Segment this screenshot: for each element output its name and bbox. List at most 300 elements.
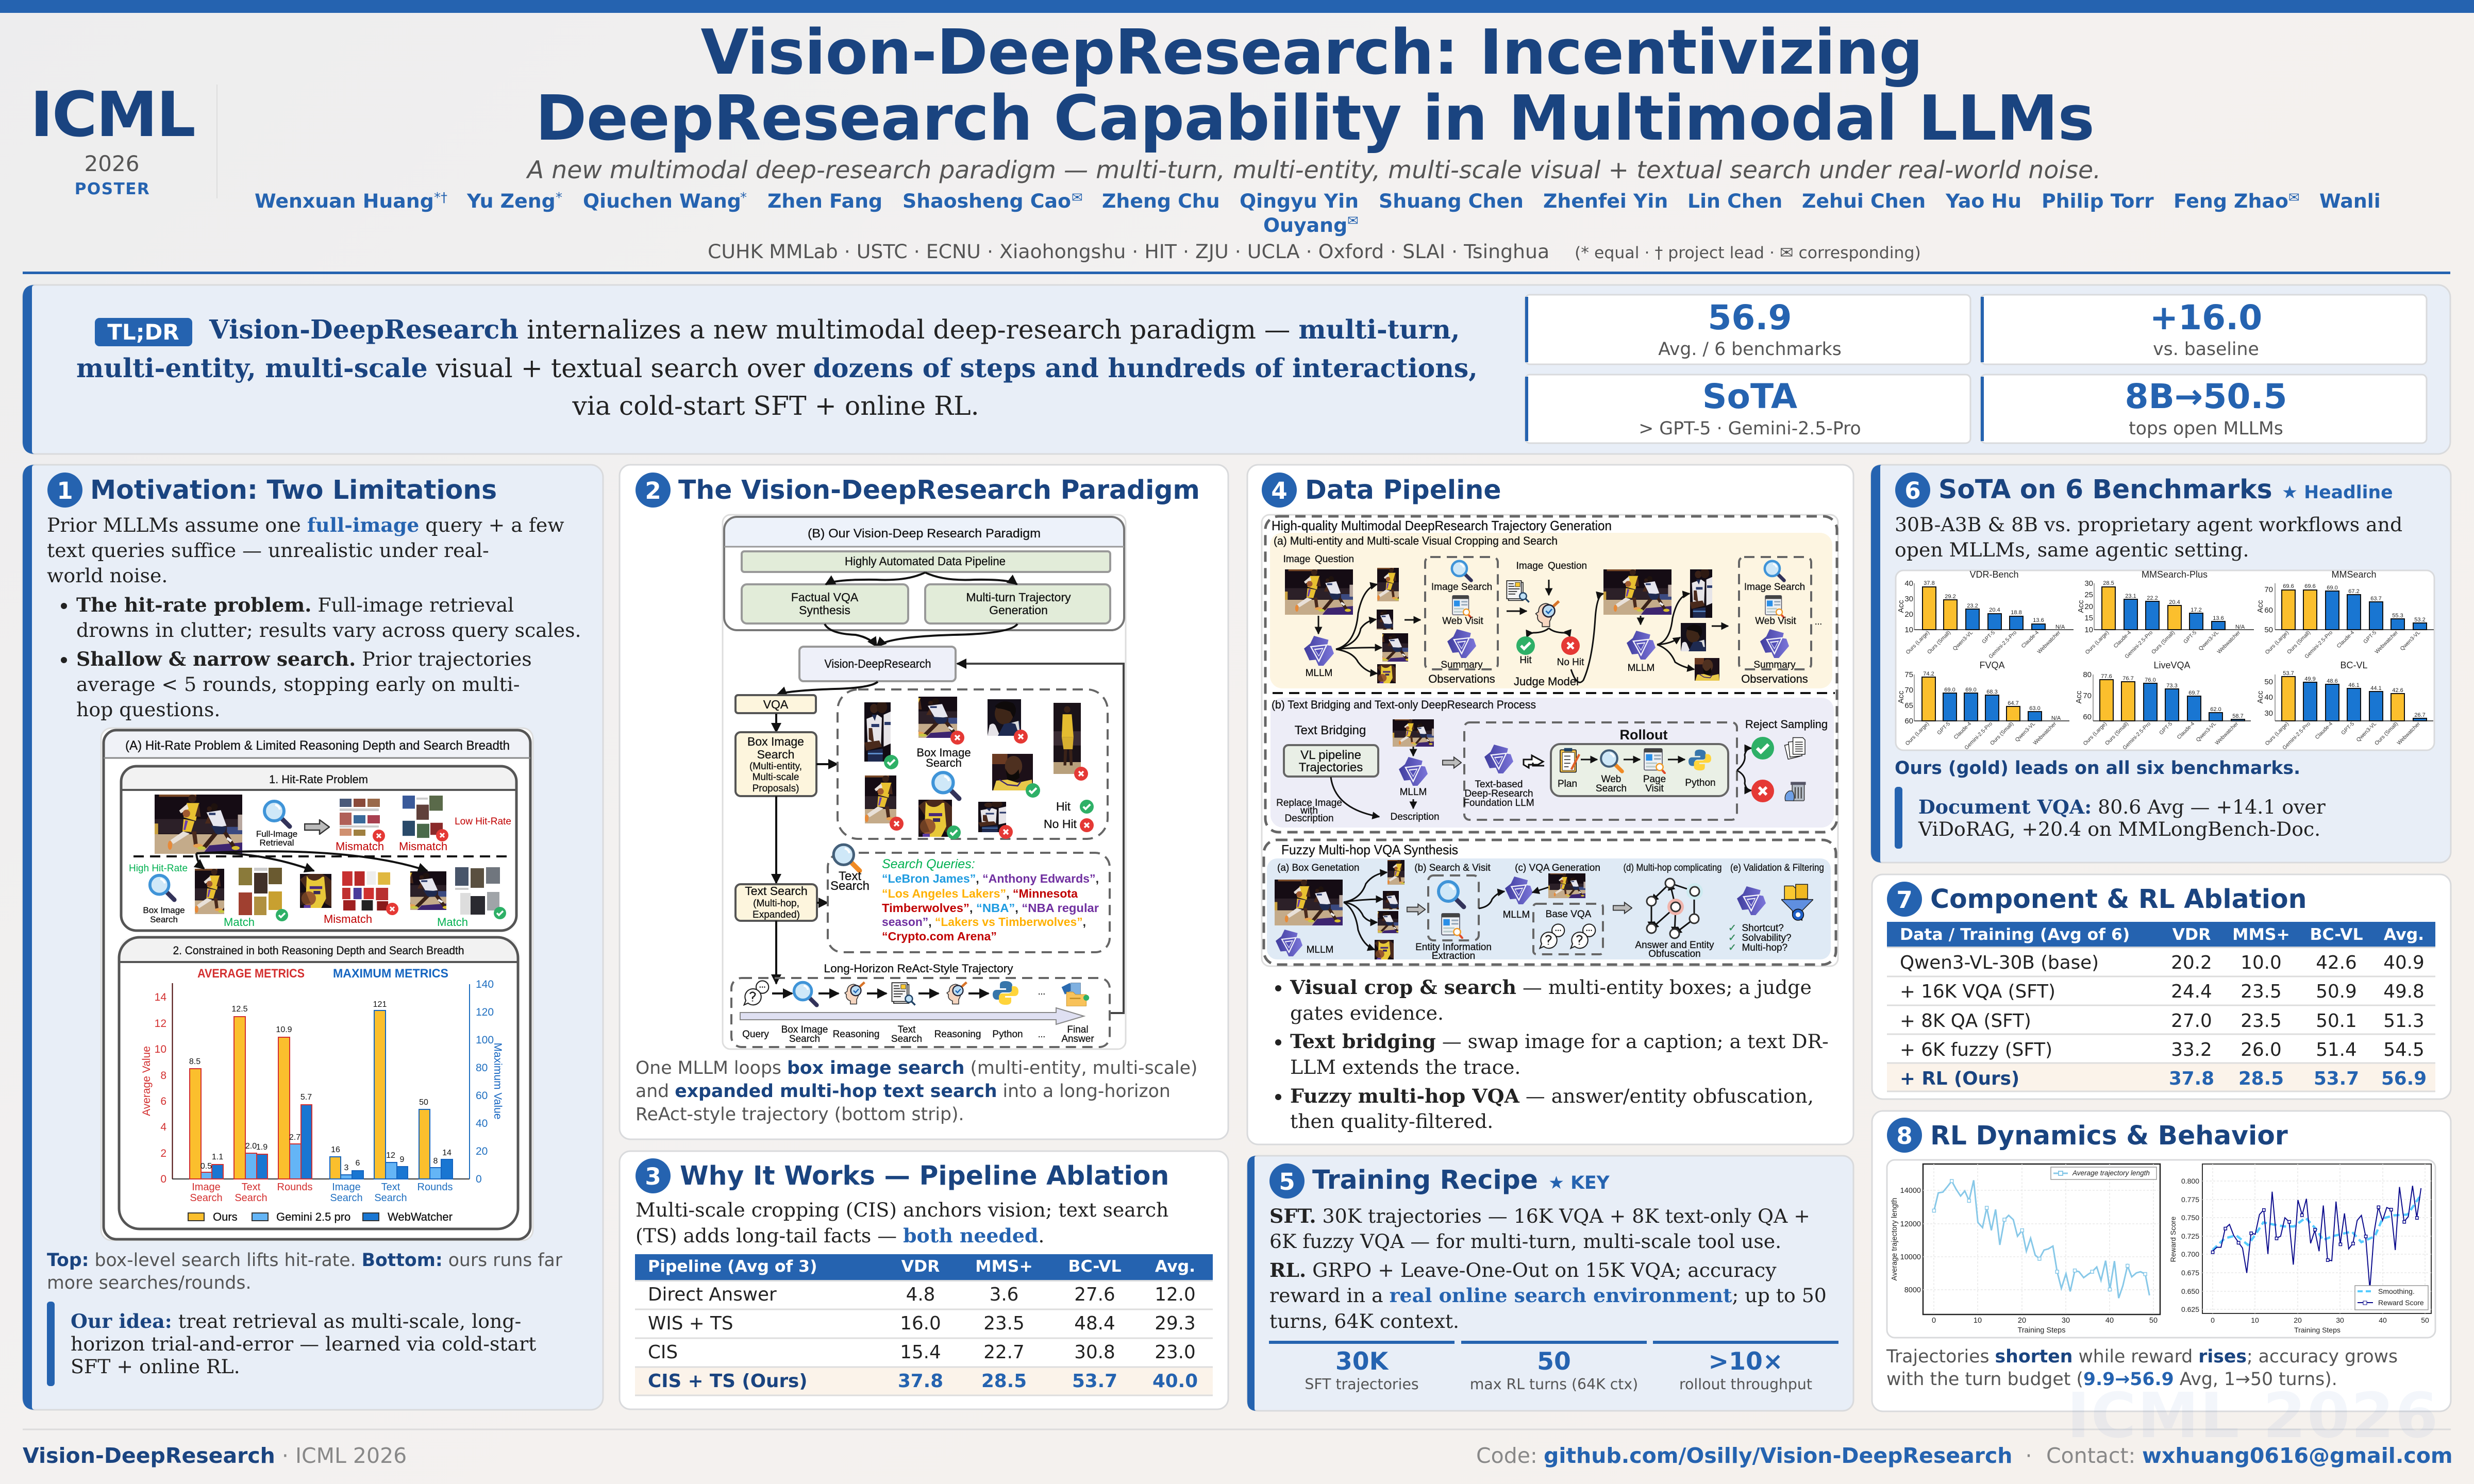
motivation text: world noise. [47,564,168,587]
chart: trajectory length: 40 [2105,1317,2114,1325]
stat: 56.9: Avg. / 6 benchmarks [1658,339,1842,360]
chart: MMSearch-Plus [2077,569,2254,660]
subfigure bar chart: 0 [160,1173,166,1185]
table: component ablation: MMS+ [2232,925,2290,944]
conference badge [30,79,217,198]
recipe text: RL. GRPO + Leave-One-Out on 15K VQA; accuracy [1269,1259,1777,1281]
watermark: ICML 2026 [2067,1380,2439,1452]
chart: MMSearch-Plus: 17.2 [2191,607,2202,613]
subfigure bar chart: 5.7 [300,1093,312,1102]
chart: VDR-Bench [1897,569,2074,660]
stat: SoTA [1525,375,1970,443]
subfigure bar chart: Search [190,1192,223,1204]
stat: 50: 50 [1537,1347,1571,1376]
chart: MMSearch: Claude-4 [2335,630,2355,649]
table: component ablation: 50.9 [2316,981,2357,1002]
chart: BC-VL: Claude-4 [2314,721,2334,740]
TL;DR summary text [76,314,1478,421]
heading 5: 5 [1279,1168,1295,1195]
pipeline bullets: gates evidence. [1290,1002,1444,1024]
heading 7: 7 [1896,886,1913,914]
authors: Lin Chen [1687,190,1782,212]
observations box: Web Visit [1755,616,1796,627]
heading 4: Data Pipeline [1305,475,1501,505]
subfigure hit-rate: Match [224,916,255,929]
subfigure bar chart: 9 [400,1155,405,1164]
chart: FVQA: Acc [1897,690,1905,704]
chart: MMSearch-Plus: 15 [2084,614,2093,622]
table: component ablation: + 16K VQA (SFT) [1900,981,2055,1002]
chart: reward score: 10 [2251,1316,2259,1324]
chart: VDR-Bench: 29.2 [1945,594,1956,600]
chart: FVQA: 65 [1904,701,1913,710]
rollout box: Page [1643,774,1666,785]
table: pipeline ablation: 23.5 [983,1313,1025,1334]
box image search step: Search [757,748,794,761]
motivation text [47,514,581,721]
chart: BC-VL: Qwen3-VL [2355,721,2378,743]
stage (b): text bridging: VL pipeline [1300,748,1361,762]
fuzzy VQA synthesis: MLLM [1307,945,1333,955]
observations box [1739,557,1811,685]
rollout box: Search [1596,783,1627,794]
chart: LiveVQA: 69.7 [2188,690,2200,696]
stat: >10x [1653,1341,1838,1393]
subfigure bar chart: 50 [419,1098,428,1107]
chart: trajectory length: 0 [1932,1317,1936,1325]
authors: ✉ [1072,190,1083,206]
table: component ablation: 40.9 [2383,952,2425,973]
heading 5 [1269,1163,1610,1199]
stat: SoTA: > GPT-5 · Gemini-2.5-Pro [1639,418,1861,439]
table: component ablation: 23.5 [2241,1010,2282,1032]
panel 5: training recipe [1247,1156,1853,1411]
chart: MMSearch-Plus: 22.2 [2147,595,2158,601]
chart: MMSearch: 67.2 [2348,588,2360,595]
chart: BC-VL: 40 [2264,693,2273,702]
benchmarks takeaway: Ours (gold) leads on all six benchmarks. [1895,758,2300,779]
chart: trajectory length: Average trajectory length [1891,1198,1899,1280]
RL charts [1887,1160,2435,1338]
fuzzy VQA synthesis: ✓ Shortcut? [1728,923,1784,934]
subfigure bar chart: 6 [356,1159,360,1168]
table: pipeline ablation: 3.6 [990,1284,1018,1305]
panel 6: SoTA benchmarks [1871,465,2451,863]
heading 6: ★ Headline [2282,482,2393,503]
chart: VDR-Bench: Ours (Large) [1905,630,1931,655]
table: component ablation: 24.4 [2171,981,2212,1002]
ReAct trajectory strip: Text [898,1024,916,1035]
subfigure hit-rate [121,766,516,931]
chart: trajectory length: 10 [1974,1317,1982,1325]
observations box: Image Search [1431,582,1492,593]
chart: FVQA: Ours (Small) [1989,721,2015,747]
observations box: Observations [1741,672,1808,685]
benchmarks intro: 30B-A3B & 8B vs. proprietary agent workflows and [1895,513,2402,536]
subfigure bar chart: 2.7 [289,1133,300,1142]
chart: MMSearch: 55.3 [2392,613,2403,619]
table: pipeline ablation: 12.0 [1155,1284,1196,1305]
search queries box [828,845,1110,952]
authors: Shuang Chen [1379,190,1524,212]
chart: VDR-Bench: 20.4 [1989,607,2000,613]
chart legend: Ours [213,1210,238,1223]
chart: LiveVQA: 76.7 [2122,676,2134,682]
chart: LiveVQA: 76.0 [2145,677,2156,683]
ReAct trajectory strip: Final [1067,1024,1089,1035]
chart: BC-VL: 44.1 [2370,685,2382,692]
subfigure bar chart: 8.5 [189,1057,200,1066]
affiliations [708,240,1921,263]
observations box: Web Visit [1442,616,1483,627]
pipeline bar: Highly Automated Data Pipeline [845,554,1006,568]
table: pipeline ablation: CIS [648,1342,678,1363]
stat: +16.0 [1981,295,2427,364]
rollout box [1463,722,1737,820]
panel 8: RL dynamics [1872,1111,2451,1411]
base VQA box [1533,904,1603,954]
paradigm caption [636,1058,1197,1125]
subfigure bar chart: 0.5 [200,1162,212,1171]
chart: LiveVQA: 62.0 [2210,706,2221,713]
chart: FVQA: Claude-4 [1952,721,1972,740]
authors: Qiuchen Wang [583,190,741,212]
authors: Qingyu Yin [1240,190,1359,212]
authors: Wenxuan Huang [255,190,434,212]
fuzzy VQA synthesis: Entity Information [1415,942,1492,953]
table: component ablation: Avg. [2384,925,2424,944]
chart: FVQA [1897,660,2069,751]
authors: ✉ [2288,190,2300,206]
chart: MMSearch: 50 [2264,626,2273,634]
recipe text: SFT. 30K trajectories — 16K VQA + 8K text-only QA + [1269,1205,1810,1227]
subfigure bar chart: 16 [331,1145,340,1154]
Vision-DeepResearch box [799,647,956,681]
table: component ablation: BC-VL [2310,925,2363,944]
subfigure bar chart: 12 [386,1151,395,1160]
chart: LiveVQA: Qwen3-VL [2195,721,2217,743]
subfigure bar chart: Maximum Value [492,1043,504,1119]
chart: reward score: 0.725 [2181,1232,2199,1240]
stage (a): visual cropping: (a) Multi-entity and Multi-scale Visual Cropping and Search [1274,534,1558,547]
affiliations: CUHK MMLab · USTC · ECNU · Xiaohongshu · HIT · ZJU · UCLA · Oxford · SLAI · Tsinghua [708,240,1549,263]
table: component ablation: + 8K QA (SFT) [1900,1010,2031,1032]
heading 7: Component & RL Ablation [1930,884,2307,914]
table: pipeline ablation: 15.4 [900,1342,941,1363]
table: component ablation: + RL (Ours) [1900,1068,2019,1089]
chart: FVQA: 69.0 [1965,687,1977,693]
stat: SoTA: SoTA [1702,377,1797,416]
table: pipeline ablation: 27.6 [1074,1284,1115,1305]
callout: our idea: horizon trial-and-error — learned via cold-start [71,1333,536,1355]
table: pipeline ablation: WIS + TS [648,1313,733,1334]
chart: FVQA: FVQA [1979,660,2005,670]
figure A [101,728,533,1240]
stat: 56.9 [1525,295,1970,364]
affiliations: (* equal · † project lead · ✉ corresponding) [1575,244,1921,262]
stage (a): visual cropping: No Hit [1557,657,1584,668]
callout: document VQA [1895,787,2326,849]
subfigure bar chart: 1.9 [256,1143,268,1152]
chart: reward score: 0.775 [2181,1195,2199,1204]
benchmarks intro [1895,513,2402,561]
heading 6 [1895,473,2393,508]
footer links: Code: [1476,1443,1537,1468]
chart: LiveVQA: Ours (Large) [2082,721,2108,747]
chart: MMSearch-Plus: 23.1 [2125,593,2136,599]
footer [23,1429,2453,1468]
chart: LiveVQA: Claude-4 [2176,721,2196,740]
stage (a): visual cropping: MLLM [1306,668,1332,679]
authors: Zhenfei Yin [1543,190,1668,212]
chart: VDR-Bench: Qwen3-VL [1952,630,1974,652]
ReAct trajectory strip [731,978,1110,1047]
chart: BC-VL: Acc [2256,690,2265,704]
chart: FVQA: 63.0 [2029,705,2041,712]
chart: MMSearch-Plus: N/A [2235,624,2245,630]
subfigure bar chart: 3 [344,1163,349,1172]
chart: LiveVQA: 73.3 [2166,683,2178,689]
TL;DR summary text: multi-entity, multi-scale visual + textual search over dozens of steps and hundreds of interactions, [76,353,1478,383]
subtitle: A new multimodal deep-research paradigm — multi-turn, multi-entity, multi-scale visual + textual search under real-world noise. [526,156,2101,184]
text search step: (Multi-hop, [753,898,799,909]
box image search step [735,732,816,796]
ReAct trajectory strip: Search [789,1034,820,1044]
chart: MMSearch-Plus: 13.6 [2213,615,2224,621]
stage (a): visual cropping: Judge Model [1514,675,1579,688]
stat: +16.0: +16.0 [2150,298,2262,338]
stat: +16.0: vs. baseline [2153,339,2259,360]
chart: trajectory length [1891,1164,2160,1335]
ReAct trajectory strip: Search [891,1034,922,1044]
table: pipeline ablation: 40.0 [1152,1371,1198,1392]
chart: FVQA: 74.2 [1923,671,1934,677]
box image search step: (Multi-entity, [749,761,802,772]
chart: FVQA: 68.3 [1986,689,1998,695]
chart: MMSearch-Plus: Ours (Large) [2084,630,2110,655]
rollout box: Deep-Research [1464,788,1533,799]
subfigure bar chart: 120 [476,1006,494,1018]
chart: MMSearch-Plus: Acc [2077,600,2085,613]
chart: reward score: 40 [2379,1316,2387,1324]
recipe text: 6K fuzzy VQA — for multi-turn, multi-scale tool use. [1269,1230,1781,1253]
motivation text: The hit-rate problem. Full-image retrieval [76,594,514,616]
chart: VDR-Bench: Ours (Small) [1926,630,1952,655]
chart: reward score: 0 [2211,1316,2215,1324]
chart: MMSearch-Plus: 10 [2084,626,2093,634]
subfigure hit-rate: Mismatch [324,913,372,925]
factual VQA box [742,584,908,623]
chart: trajectory length: 8000 [1904,1286,1921,1294]
table: pipeline ablation: Avg. [1155,1257,1195,1276]
stat: 56.9: 56.9 [1708,298,1792,338]
footer links [1476,1443,2453,1468]
VQA box: VQA [763,698,789,711]
figure A caption: more searches/rounds. [47,1273,251,1293]
subfigure bar chart: 121 [373,1000,387,1009]
benchmarks intro: open MLLMs, same agentic setting. [1895,538,2249,561]
authors: Yu Zeng [466,190,556,212]
chart: reward score: Smoothing. [2378,1287,2415,1295]
rollout box: Rollout [1620,727,1667,743]
ablation intro text: (TS) adds long-tail facts — both needed. [636,1224,1044,1247]
table: pipeline ablation: MMS+ [975,1257,1033,1276]
stage (b): text bridging [1271,698,1834,828]
chart: MMSearch: Acc [2256,600,2265,613]
chart: reward score: 0.700 [2181,1250,2199,1258]
RL caption: with the turn budget (9.9→56.9 Avg, 1→50 turns). [1886,1369,2337,1390]
authors: *† [434,190,447,206]
chart: VDR-Bench: Gemini-2.5-Pro [1987,630,2018,660]
observations box: Summary [1441,660,1483,670]
stage (b): text bridging: Description [1390,812,1440,822]
heading 5: ★ KEY [1548,1173,1610,1193]
top accent bar [0,0,2474,13]
chart: reward score: 0.800 [2181,1177,2199,1185]
subfigure bar chart: 4 [160,1121,166,1133]
search queries box: Text [839,869,861,883]
subfigure bar chart: 12.5 [231,1005,248,1014]
search queries box: “Los Angeles Lakers”, “Minnesota [882,887,1078,900]
chart: MMSearch-Plus: MMSearch-Plus [2142,569,2208,580]
subfigure bar chart: 10 [155,1043,166,1055]
stat: 30K [1269,1341,1455,1393]
subfigure bar chart: 20 [476,1145,488,1157]
panel 3: pipeline ablation [620,1151,1228,1409]
table: component ablation: 42.6 [2316,952,2357,973]
callout: document VQA: Document VQA: 80.6 Avg — +14.1 over [1918,796,2326,818]
chart: MMSearch: 69.6 [2283,583,2294,589]
subfigure bar chart: 14 [442,1149,452,1157]
chart: FVQA: Qwen3-VL [2014,721,2036,743]
stat: 8B to 50.5: 8B→50.5 [2125,377,2287,416]
chart: VDR-Bench: 10 [1904,626,1913,634]
ReAct trajectory strip: ... [1038,987,1045,997]
entity graph [1647,879,1703,938]
panel 4: data pipeline [1247,465,1853,1144]
fuzzy VQA synthesis: (e) Validation & Filtering [1730,863,1824,873]
authors: Wanli [2319,190,2381,212]
stage (b): text bridging: Trajectories [1299,761,1363,774]
heading 8: 8 [1896,1122,1913,1150]
figure B: (B) Our Vision-Deep Research Paradigm [808,527,1041,541]
chart: FVQA: Gemini-2.5-Pro [1963,721,1994,751]
chart: reward score: 0.650 [2181,1287,2199,1295]
fuzzy VQA synthesis: Fuzzy Multi-hop VQA Synthesis [1281,842,1458,857]
authors: Philip Torr [2042,190,2154,212]
chart: VDR-Bench: 13.6 [2033,617,2044,623]
chart: trajectory length: 14000 [1900,1187,1921,1195]
heading 1: Motivation: Two Limitations [90,475,497,505]
fuzzy VQA synthesis: Answer and Entity [1635,940,1714,951]
chart: MMSearch: Ours (Small) [2286,630,2312,655]
chart: LiveVQA: LiveVQA [2153,660,2191,670]
table: component ablation: + 6K fuzzy (SFT) [1900,1039,2052,1060]
observations box: Summary [1753,660,1796,670]
ReAct trajectory strip: Reasoning [934,1029,981,1040]
table: pipeline ablation: BC-VL [1068,1257,1122,1276]
fuzzy VQA synthesis: (d) Multi-hop complicating [1624,863,1721,873]
chart: BC-VL: 48.6 [2327,678,2338,684]
table: pipeline ablation: 48.4 [1074,1313,1115,1334]
chart: LiveVQA: Gemini-2.5-Pro [2121,721,2152,751]
chart: LiveVQA: 70 [2083,692,2092,700]
pipeline bar [742,551,1110,572]
table: component ablation: Qwen3-VL-30B (base) [1900,952,2099,973]
factual VQA box: Synthesis [799,603,850,617]
rollout box: Foundation LLM [1463,798,1534,808]
authors: Shaosheng Cao [902,190,1071,212]
chart: MMSearch-Plus: Ours (Small) [2150,630,2176,655]
subfigure hit-rate: Box Image [143,905,185,915]
subfigure bar chart: AVERAGE METRICS [197,967,305,981]
Vision-DeepResearch box: Vision-DeepResearch [825,657,931,670]
chart: MMSearch: 69.6 [2304,583,2316,589]
subfigure bar chart: Rounds [417,1182,453,1193]
panel 2: paradigm [620,465,1228,1139]
chart: BC-VL: 49.9 [2304,676,2316,682]
table: pipeline ablation: VDR [901,1257,940,1276]
subfigure bar chart: 2. Constrained in both Reasoning Depth and Search Breadth [173,944,464,957]
subfigure hit-rate: Full-Image [256,829,297,839]
title: DeepResearch Capability in Multimodal LLMs [536,83,2094,155]
callout: our idea: SFT + online RL. [71,1355,240,1378]
subfigure bar chart: 140 [476,979,494,990]
paradigm caption: and expanded multi-hop text search into a long-horizon [636,1081,1171,1102]
table: pipeline ablation [635,1254,1213,1395]
footer left credit: Vision-DeepResearch · ICML 2026 [23,1443,407,1468]
table: component ablation: 20.2 [2171,952,2212,973]
subfigure hit-rate: Low Hit-Rate [455,816,511,827]
subfigure bar chart: 14 [155,991,166,1003]
fuzzy VQA synthesis: ✓ Solvability? [1728,933,1792,943]
chart: BC-VL: 26.7 [2414,712,2426,718]
subfigure hit-rate: Mismatch [399,840,447,853]
chart: MMSearch: GPT-5 [2362,630,2378,645]
table: pipeline ablation: CIS + TS (Ours) [648,1371,808,1392]
recipe text: turns, 64K context. [1269,1310,1459,1333]
chart: MMSearch-Plus: Claude-4 [2112,630,2132,649]
chart: LiveVQA: 60 [2083,713,2092,721]
chart: LiveVQA [2075,660,2251,751]
pipeline bullets [1275,976,1829,1133]
figure A caption: Top: box-level search lifts hit-rate. Bottom: ours runs far [47,1250,563,1271]
subfigure hit-rate: High Hit-Rate [129,863,188,874]
chart: reward score: 0.675 [2181,1269,2199,1277]
chart legend: Gemini 2.5 pro [276,1210,350,1223]
fuzzy VQA synthesis: (c) VQA Generation [1515,863,1600,873]
chart: BC-VL: BC-VL [2340,660,2368,670]
subfigure bar chart: Image [332,1182,361,1193]
panel 7: component ablation [1872,874,2451,1099]
table: component ablation: 53.7 [2314,1068,2359,1089]
subfigure bar chart: 40 [476,1118,488,1129]
conference badge: ICML [30,79,195,151]
RL caption: Trajectories shorten while reward rises; accuracy grows [1886,1346,2398,1367]
text search step: Text Search [745,884,808,898]
search queries box: season”, “Lakers vs Timberwolves”, [882,915,1086,929]
trajectory generation box: Multi-turn Trajectory [966,591,1071,604]
heading 3: Why It Works — Pipeline Ablation [680,1160,1169,1191]
subfigure bar chart: Search [374,1192,407,1204]
chart: VDR-Bench: 40 [1904,579,1913,588]
header [30,17,2381,263]
chart: MMSearch-Plus: 25 [2084,591,2093,599]
fuzzy VQA synthesis: Obfuscation [1648,949,1701,959]
authors: Yao Hu [1945,190,2021,212]
table: component ablation: 28.5 [2238,1068,2284,1089]
stage (b): text bridging: (b) Text Bridging and Text-only DeepResearch Process [1272,698,1536,711]
